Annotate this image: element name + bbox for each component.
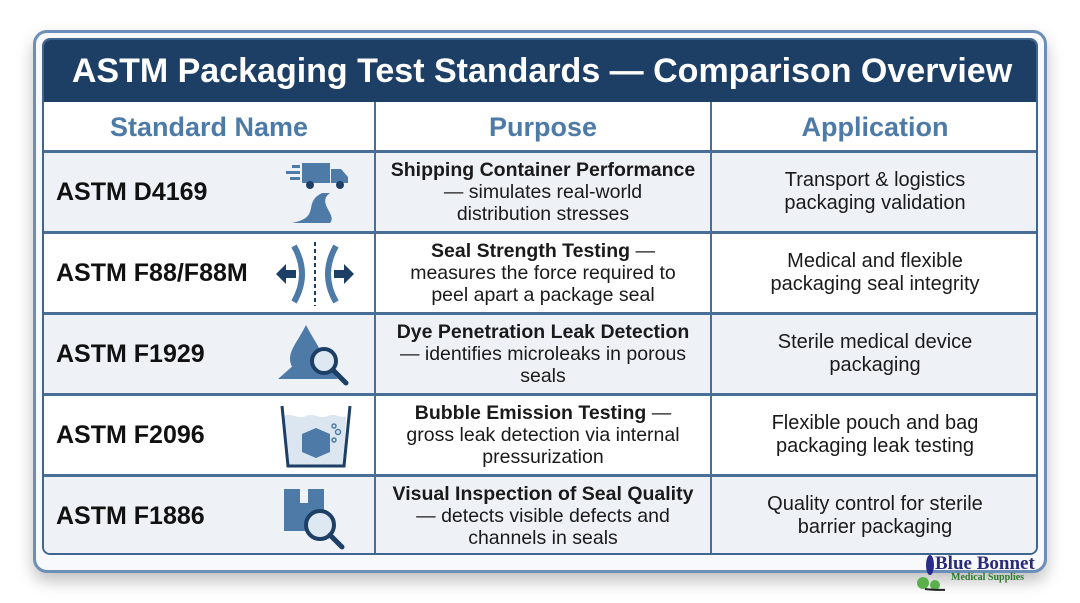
header: purpose: Purpose [489,112,597,142]
logo: Blue Bonnet: Medical Supplies [951,572,1024,583]
row: F88: packaging seal integrity [770,273,980,295]
icon: box in water tank [280,406,352,468]
header: standard name: Standard Name [110,112,308,142]
header: standard name [44,102,374,152]
row: F2096: gross leak detection via internal [406,424,680,446]
row: D4169: ASTM D4169 [56,178,207,206]
row: F1929: — identifies microleaks in porous [400,343,686,365]
row: F88: peel apart a package seal [431,284,655,306]
row: F1886: barrier packaging [798,516,952,538]
row: F2096: packaging leak testing [776,435,974,457]
row: F2096 [44,393,1040,474]
row: F1929 [44,312,1040,393]
row: F1886: ASTM F1886 [56,502,205,530]
title: ASTM Packaging Test Standards — Comparison Overview [72,52,1012,90]
row: F1886: Visual Inspection of Seal Quality [393,483,693,505]
row: F1929: seals [520,365,566,387]
row: F1929: ASTM F1929 [56,340,205,368]
icon: truck on road [286,163,348,223]
row: F88 [44,231,1040,312]
row: D4169: packaging validation [784,192,966,214]
icon: package with magnifier [284,489,344,550]
row: F1886: — detects visible defects and [416,505,670,527]
logo: Blue Bonnet: Blue Bonnet [935,553,1035,574]
header: application: Application [802,112,948,142]
header: application [710,102,1040,152]
row: F2096: pressurization [482,446,604,468]
row: D4169: Shipping Container Performance [391,159,695,181]
header: purpose [376,102,710,152]
row: F88: Seal Strength Testing — [431,240,655,262]
row: D4169: — simulates real-world [444,181,642,203]
row: F88: measures the force required to [410,262,676,284]
row: D4169 [44,150,1040,231]
row: F2096: Flexible pouch and bag [772,412,978,434]
row: F1929: packaging [829,354,921,376]
row: D4169: distribution stresses [457,203,629,225]
row: F1929: Sterile medical device [778,331,972,353]
row: F88: ASTM F88/F88M [56,259,248,287]
logo: Blue Bonnet [917,553,1035,591]
row: F2096: ASTM F2096 [56,421,205,449]
row: F1886: channels in seals [468,527,618,549]
icon: dye drop with magnifier [278,325,348,386]
comparison table [42,38,1038,555]
row: F1886: Quality control for sterile [767,493,983,515]
row: F2096: Bubble Emission Testing — [415,402,671,424]
row: F88: Medical and flexible [787,250,963,272]
row: F1929: Dye Penetration Leak Detection [397,321,689,343]
row: D4169: Transport & logistics [785,169,965,191]
title [44,40,1040,102]
icon: seal peel arrows [276,242,354,306]
row: F1886 [44,474,1040,555]
